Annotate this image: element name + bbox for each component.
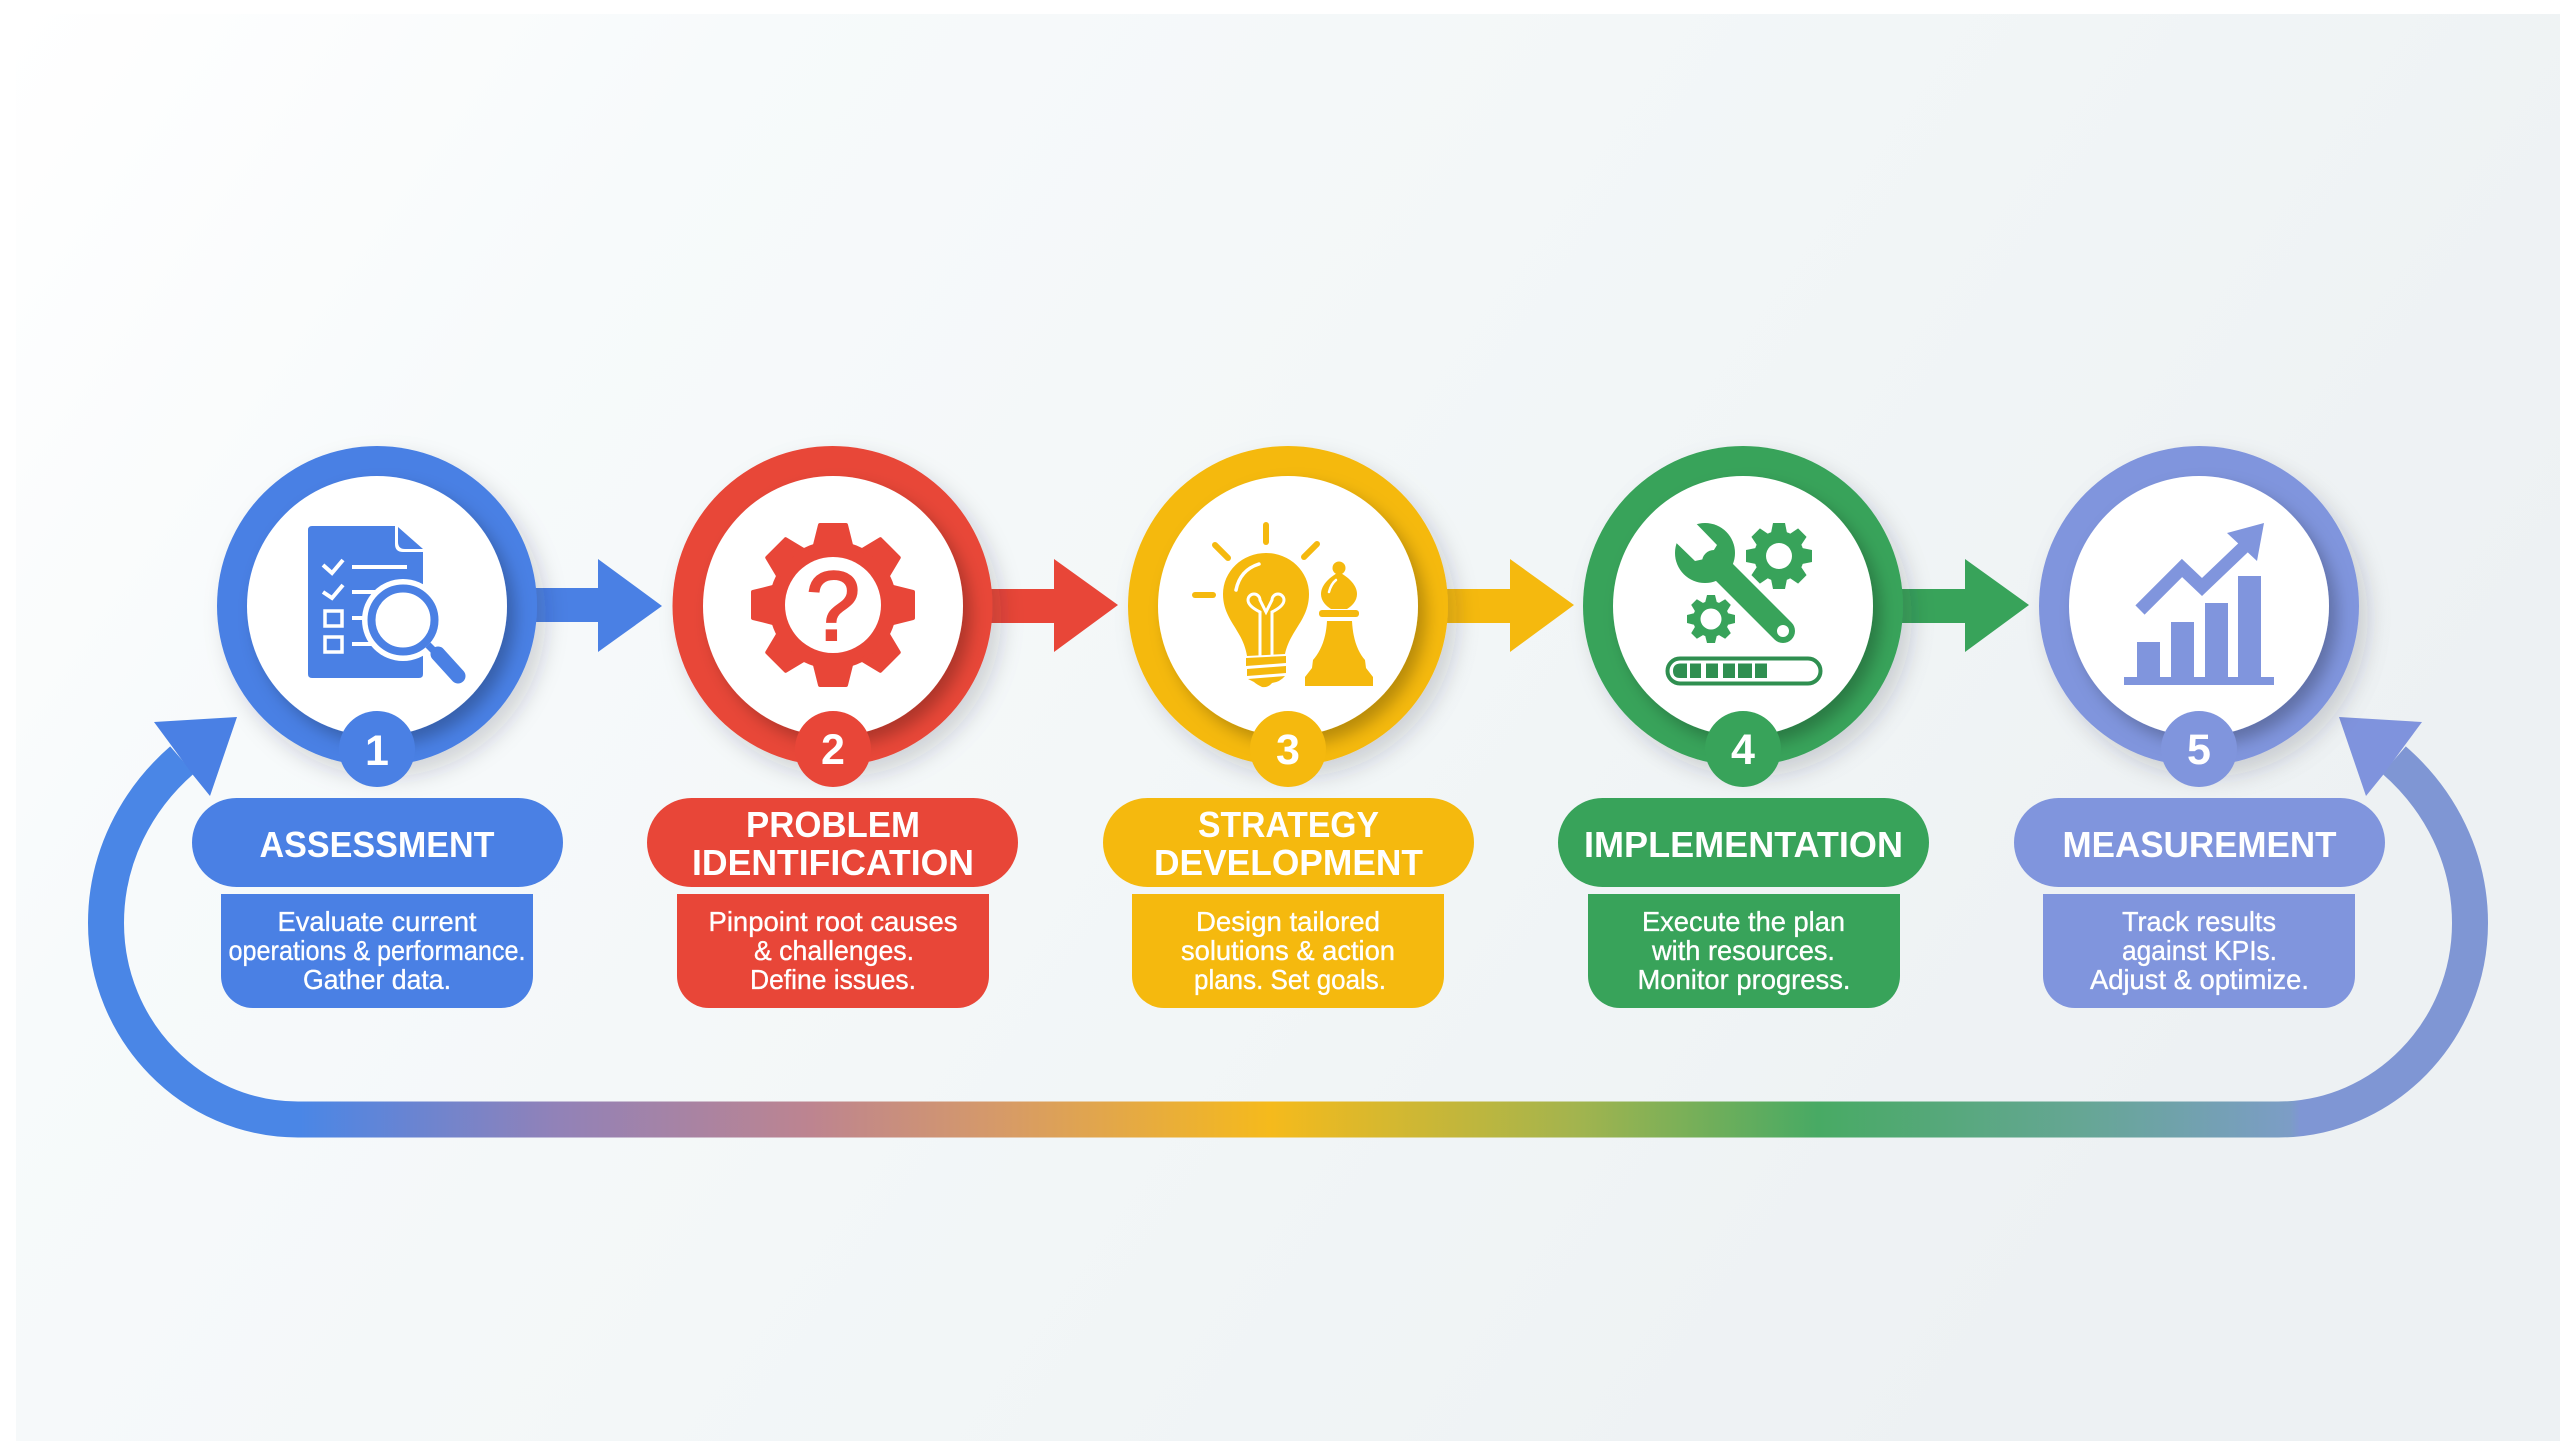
description box 4: [1588, 894, 1900, 1008]
description box 4: Execute the plan: [1642, 906, 1845, 937]
ring 2: [672, 446, 992, 766]
heading pill 3: DEVELOPMENT: [1154, 842, 1423, 883]
description box 1: operations & performance.: [228, 935, 526, 966]
number badge 4: [1705, 711, 1781, 787]
heading pill 2: IDENTIFICATION: [692, 842, 974, 883]
number badge 2: 2: [821, 726, 845, 774]
description box 3: solutions & action: [1181, 935, 1395, 966]
heading pill 4: IMPLEMENTATION: [1584, 824, 1903, 865]
panel: step 5 measurement: [2014, 446, 2385, 1008]
number badge 1: 1: [365, 727, 389, 775]
number badge 1: [339, 711, 415, 787]
description box 5: Adjust & optimize.: [2090, 964, 2309, 995]
description box 3: Design tailored: [1196, 906, 1380, 937]
description box 5: against KPIs.: [2122, 935, 2277, 966]
icon: checklist with magnifier: [308, 526, 458, 678]
white disc 4: [1613, 476, 1873, 736]
arrow: step 2 to 3: [975, 559, 1118, 652]
heading pill 5: MEASUREMENT: [2062, 824, 2336, 865]
number badge 4: 4: [1731, 726, 1755, 774]
heading pill 4: [1558, 798, 1929, 887]
description box 2: & challenges.: [754, 935, 914, 966]
white disc 2: [703, 476, 963, 736]
panel: step 3 strategy development: [1103, 446, 1574, 1008]
ring 1: [217, 446, 537, 766]
heading pill 1: ASSESSMENT: [260, 824, 495, 865]
description box 3: plans. Set goals.: [1194, 964, 1386, 995]
icon: wrench, gears and progress bar: [1663, 512, 1820, 684]
description box 1: Gather data.: [303, 964, 451, 995]
icon: gear with question mark: [753, 525, 913, 685]
feedback loop arrow: [106, 717, 2470, 1120]
white disc 5: [2069, 476, 2329, 736]
heading pill 5: [2014, 798, 2385, 887]
description box 4: with resources.: [1651, 935, 1835, 966]
description box 4: Monitor progress.: [1638, 964, 1850, 995]
heading pill 3: [1103, 798, 1474, 887]
description box 1: [221, 894, 533, 1008]
ring 4: [1583, 446, 1903, 766]
number badge 2: [795, 711, 871, 787]
number badge 5: 5: [2187, 726, 2211, 774]
white disc 1: [247, 476, 507, 736]
arrow: step 1 to 2: [520, 559, 662, 652]
ring 5: [2039, 446, 2359, 766]
panel: step 1 assessment: [192, 446, 662, 1008]
description box 2: [677, 894, 989, 1008]
heading pill 2: PROBLEM: [746, 804, 920, 845]
heading pill 2: [647, 798, 1018, 887]
description box 2: Define issues.: [750, 964, 916, 995]
heading pill 3: STRATEGY: [1198, 804, 1379, 845]
ring 3: [1128, 446, 1448, 766]
number badge 3: 3: [1276, 726, 1300, 774]
arrow: step 3 to 4: [1430, 559, 1574, 652]
description box 5: [2043, 894, 2355, 1008]
description box 2: Pinpoint root causes: [708, 906, 958, 937]
icon: gear with question mark: ?: [806, 551, 860, 661]
description box 1: Evaluate current: [278, 906, 477, 937]
icon: growth bar chart with arrow: [2124, 523, 2274, 685]
panel: step 2 problem identification: [647, 446, 1118, 1008]
icon: light bulb and chess bishop: [1195, 525, 1373, 687]
arrow: step 4 to 5: [1885, 559, 2029, 652]
description box 5: Track results: [2122, 906, 2276, 937]
number badge 5: [2161, 711, 2237, 787]
white disc 3: [1158, 476, 1418, 736]
heading pill 1: [192, 798, 563, 887]
description box 3: [1132, 894, 1444, 1008]
panel: step 4 implementation: [1558, 446, 2029, 1008]
number badge 3: [1250, 711, 1326, 787]
